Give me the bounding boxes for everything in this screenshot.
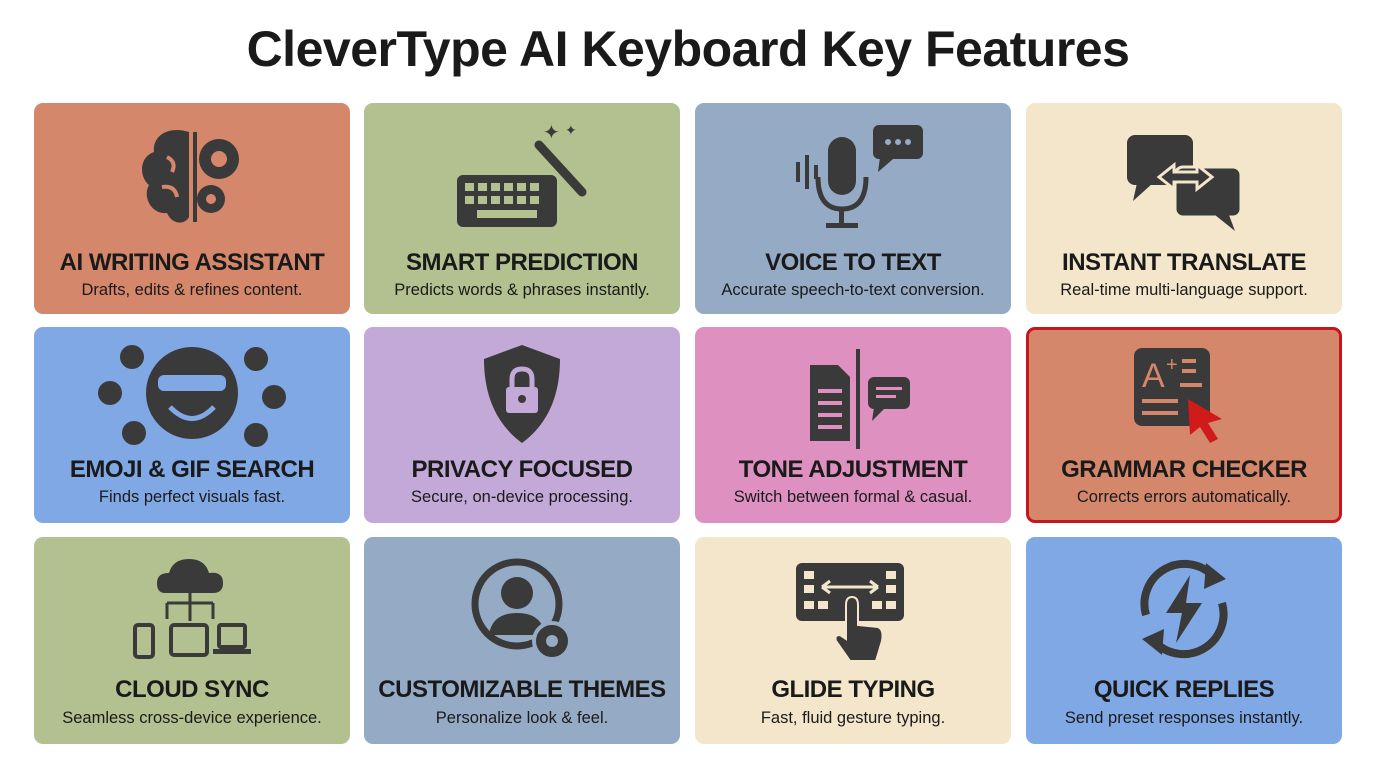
heading: CLOUD SYNC [115, 676, 269, 703]
heading: QUICK REPLIES [1094, 676, 1274, 703]
panel: privacy focused [364, 327, 680, 523]
panel: smart prediction [364, 103, 680, 314]
heading: CUSTOMIZABLE THEMES [378, 676, 666, 703]
panel: tone adjustment [695, 327, 1011, 523]
heading: AI WRITING ASSISTANT [60, 249, 324, 276]
heading: GLIDE TYPING [771, 676, 935, 703]
text: Predicts words & phrases instantly. [394, 281, 650, 299]
text: Corrects errors automatically. [1077, 488, 1291, 506]
text: Real-time multi-language support. [1060, 281, 1308, 299]
panel: ai writing assistant [34, 103, 350, 314]
icon: grammar document with cursor [1134, 348, 1222, 443]
icon: keyboard with wand: ✦ [565, 122, 577, 138]
icon: grammar document with cursor: A [1142, 357, 1165, 395]
panel: glide typing [695, 537, 1011, 744]
text: Drafts, edits & refines content. [81, 281, 303, 299]
text: Send preset responses instantly. [1065, 709, 1303, 727]
text: Finds perfect visuals fast. [99, 488, 285, 506]
icon: keyboard with wand: ✦ [543, 122, 560, 144]
heading: INSTANT TRANSLATE [1062, 249, 1306, 276]
text: Fast, fluid gesture typing. [761, 709, 945, 727]
icon: translate bubbles [1127, 135, 1240, 231]
icon: user with gear [472, 558, 568, 657]
icon: circular arrows with lightning [1140, 560, 1228, 658]
heading: GRAMMAR CHECKER [1061, 456, 1307, 483]
icon: brain with gears [142, 130, 239, 223]
icon: keyboard with wand [457, 122, 586, 227]
icon: microphone with speech bubble [796, 125, 923, 228]
heading: TONE ADJUSTMENT [739, 456, 967, 483]
text: Switch between formal & casual. [734, 488, 972, 506]
text: Personalize look & feel. [436, 709, 608, 727]
icon: keyboard with hand [796, 563, 904, 660]
text: Accurate speech-to-text conversion. [721, 281, 985, 299]
heading: PRIVACY FOCUSED [412, 456, 632, 483]
panel: grammar checker [1026, 327, 1342, 523]
panel: customizable themes [364, 537, 680, 744]
icon: shield with lock [484, 345, 560, 443]
panel: voice to text [695, 103, 1011, 314]
panel: cloud sync [34, 537, 350, 744]
panel: emoji gif search [34, 327, 350, 523]
panel: instant translate [1026, 103, 1342, 314]
icon: grammar document with cursor: + [1166, 354, 1178, 376]
title: CleverType AI Keyboard Key Features [247, 21, 1129, 77]
icon: document and chat [810, 349, 910, 449]
heading: VOICE TO TEXT [765, 249, 941, 276]
panel: quick replies [1026, 537, 1342, 744]
icon: cloud to devices [133, 559, 251, 659]
icon: emoji faces [98, 345, 286, 447]
text: Secure, on-device processing. [411, 488, 633, 506]
text: Seamless cross-device experience. [62, 709, 322, 727]
heading: EMOJI & GIF SEARCH [70, 456, 314, 483]
heading: SMART PREDICTION [406, 249, 638, 276]
